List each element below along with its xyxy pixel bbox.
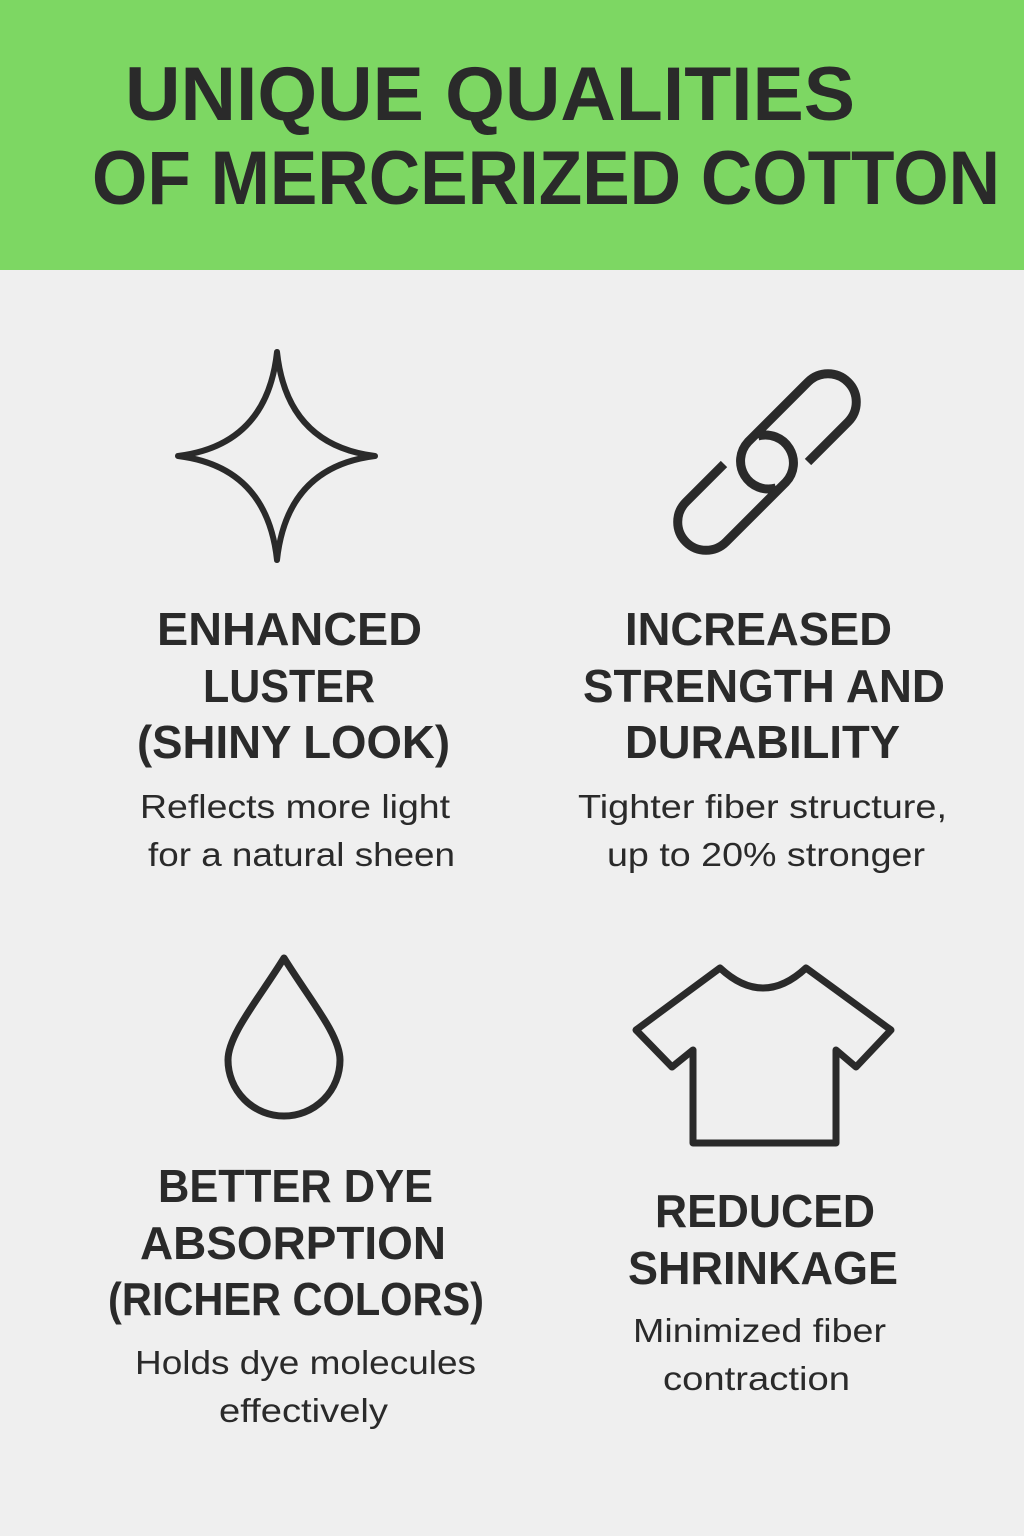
header banner — [0, 0, 1024, 270]
description: dye: effectively — [219, 1392, 389, 1429]
description: dye: Holds dye molecules — [135, 1344, 476, 1381]
description: luster — [140, 788, 455, 873]
panel: reduced shrinkage — [628, 968, 898, 1397]
heading: strength — [583, 603, 945, 768]
description: shrinkage: Minimized fiber — [633, 1312, 886, 1349]
title: UNIQUE QUALITIES — [125, 52, 855, 137]
description: luster: for a natural sheen — [148, 836, 455, 873]
heading: shrinkage — [628, 1185, 898, 1294]
heading: strength: STRENGTH AND — [583, 660, 945, 712]
heading: enhanced luster: ENHANCED — [157, 603, 422, 655]
description: strength: up to 20% stronger — [607, 836, 925, 873]
panel: enhanced luster — [137, 352, 455, 873]
heading: enhanced luster: LUSTER — [203, 660, 375, 712]
panel: increased strength — [578, 374, 947, 873]
title — [92, 52, 1000, 221]
icon: water drop — [228, 958, 340, 1116]
panel: dye absorption — [108, 958, 484, 1429]
icon: chain link — [678, 374, 856, 550]
heading: dye: (RICHER COLORS) — [108, 1273, 484, 1325]
icon: sparkle star — [178, 352, 375, 560]
heading: dye: ABSORPTION — [140, 1217, 446, 1269]
icon: t-shirt — [636, 968, 891, 1143]
heading: enhanced luster — [137, 603, 450, 768]
heading: dye — [108, 1160, 484, 1325]
heading: dye: BETTER DYE — [158, 1160, 433, 1212]
heading: shrinkage: SHRINKAGE — [628, 1242, 898, 1294]
heading: shrinkage: REDUCED — [655, 1185, 875, 1237]
heading: strength: INCREASED — [625, 603, 892, 655]
description: shrinkage — [633, 1312, 886, 1397]
description: shrinkage: contraction — [663, 1360, 850, 1397]
description: luster: Reflects more light — [140, 788, 450, 825]
heading: strength: DURABILITY — [625, 716, 900, 768]
description: strength: Tighter fiber structure, — [578, 788, 947, 825]
heading: enhanced luster: (SHINY LOOK) — [137, 716, 450, 768]
description: dye — [135, 1344, 476, 1429]
description: strength — [578, 788, 947, 873]
